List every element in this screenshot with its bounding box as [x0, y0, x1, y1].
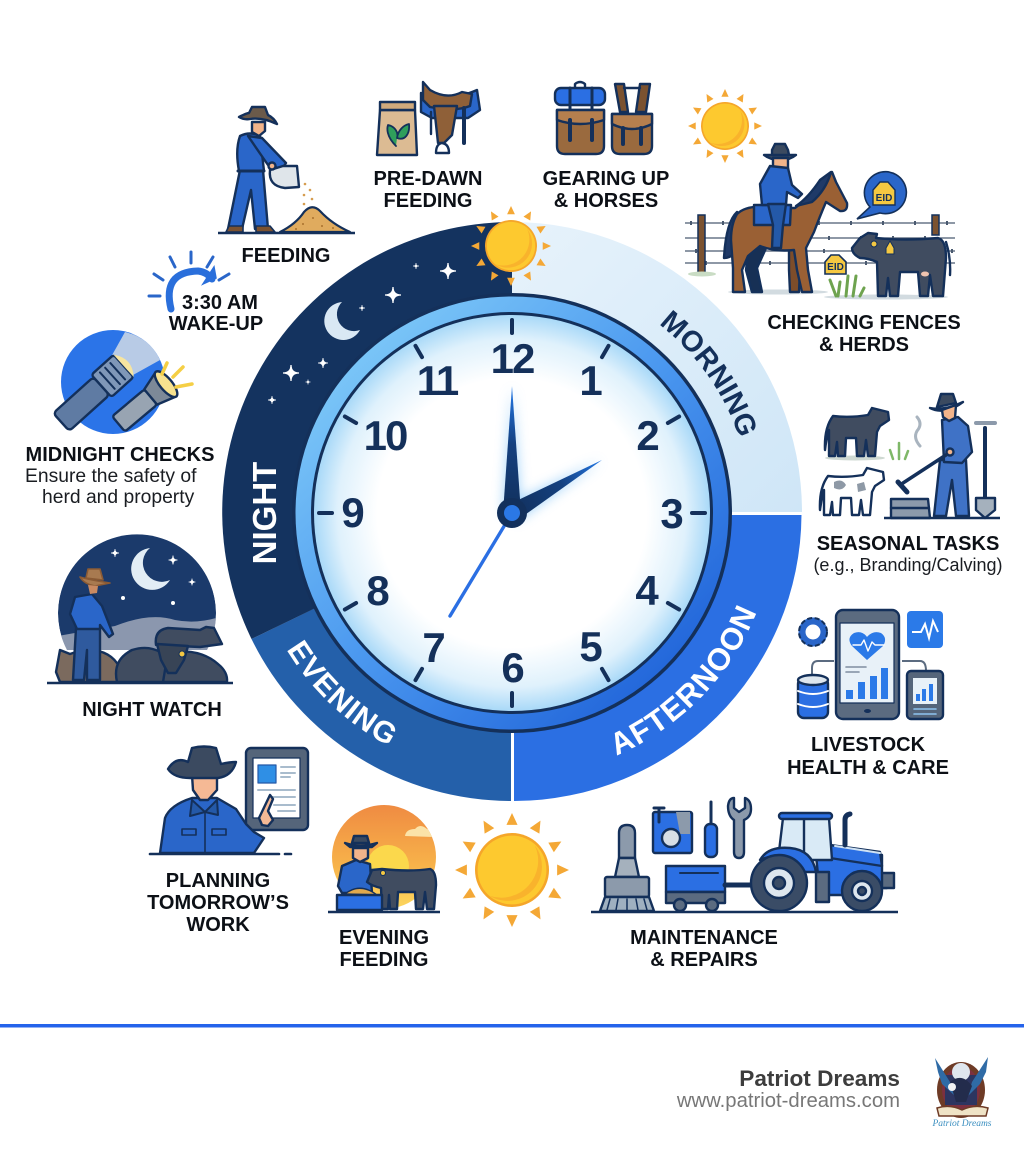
label: CHECKING FENCES — [767, 312, 961, 334]
label: morning: MORNING — [660, 310, 756, 436]
icon: morning sun — [688, 89, 762, 163]
icon: rancher with brand — [898, 394, 972, 516]
label: (e.g., Branding/Calving) — [813, 555, 1003, 575]
label: & REPAIRS — [650, 949, 758, 971]
icon: rancher — [338, 836, 377, 893]
ground line — [884, 517, 1000, 519]
icon: grass — [830, 276, 864, 296]
hand glow — [503, 386, 602, 521]
label: FEEDING — [340, 949, 428, 971]
clock numerals: 4 — [635, 567, 659, 614]
footer rule — [0, 1024, 1024, 1028]
night sky: moon and stars — [268, 263, 456, 404]
label: herd and property — [42, 487, 195, 508]
segment: morning — [512, 222, 802, 513]
icon: EID bubble — [857, 172, 906, 219]
icon: resting cattle — [56, 627, 227, 682]
icon: EID bubble: EID — [876, 193, 892, 204]
clock numerals: 8 — [366, 567, 389, 614]
ground line — [47, 682, 233, 684]
icon: smoke — [916, 417, 920, 446]
clock bezel — [292, 293, 732, 733]
logo: eagle and book: Patriot Dreams — [931, 1119, 992, 1129]
icon: light rays — [162, 363, 192, 387]
icon: phone — [836, 610, 899, 719]
clock face — [314, 315, 710, 711]
label: WORK — [186, 914, 250, 936]
time-of-day ring — [222, 222, 802, 801]
icon: air compressor cart — [666, 866, 752, 911]
label: night: NIGHT — [246, 462, 283, 564]
label — [813, 533, 1003, 575]
icon: rancher — [226, 107, 299, 232]
label: PRE-DAWN — [374, 168, 482, 190]
icon: grain pile — [280, 183, 350, 232]
ground line — [328, 911, 440, 913]
icon: blue disc — [61, 330, 165, 434]
label: 3:30 AM — [182, 292, 258, 314]
label: FEEDING — [384, 190, 472, 212]
icon: EID tag — [825, 255, 846, 274]
icon: saddle — [421, 82, 480, 153]
label: HEALTH & CARE — [787, 757, 949, 779]
clock numerals: 11 — [417, 357, 459, 404]
icon: anvil block — [891, 499, 930, 518]
label: SEASONAL TASKS — [817, 533, 999, 555]
icon: afternoon sun — [455, 813, 569, 927]
activity: feeding — [218, 107, 355, 267]
label: GEARING UP — [543, 168, 669, 190]
icon: screwdriver — [705, 802, 717, 857]
icon: moon and stars — [111, 548, 196, 605]
activity: evening feeding — [328, 805, 440, 971]
second hand — [450, 513, 512, 616]
clock numerals: 9 — [341, 489, 363, 536]
icon: grass tuft — [890, 443, 908, 459]
footer — [0, 1024, 1024, 1129]
label: & HORSES — [554, 190, 658, 212]
ground line — [150, 853, 291, 855]
icon: large flashlight — [51, 351, 138, 433]
label: PLANNING — [166, 870, 270, 892]
icon: tablet — [907, 671, 943, 719]
icon: sunrise on ring — [471, 206, 551, 286]
clock hub — [497, 498, 527, 528]
icon: pulse card — [907, 611, 943, 648]
clock — [292, 293, 732, 733]
icon: dark calf — [825, 408, 889, 460]
icon: barbed wire fence — [685, 215, 955, 300]
label: FEEDING — [242, 245, 330, 267]
icon: feed bag — [377, 102, 417, 155]
clock numerals — [341, 335, 682, 691]
icon: horse — [724, 172, 847, 292]
label: MIDNIGHT CHECKS — [26, 444, 214, 466]
icon: black cow — [852, 233, 950, 296]
segment: afternoon — [514, 515, 802, 801]
label: TOMORROW’S — [147, 892, 289, 914]
brand url: www.patriot-dreams.com — [676, 1090, 900, 1112]
activity: gearing up — [543, 82, 669, 212]
icon: motor — [653, 808, 692, 853]
clock numerals: 6 — [501, 644, 523, 691]
label: LIVESTOCK — [811, 734, 926, 756]
label: afternoon: AFTERNOON — [614, 605, 756, 756]
icon: tractor — [751, 813, 894, 911]
activity: night watch — [47, 534, 233, 721]
activity: midnight checks — [25, 330, 214, 508]
label: EVENING — [339, 927, 429, 949]
clock numerals: 3 — [660, 490, 682, 537]
clock numerals: 10 — [364, 412, 407, 459]
activity: pre-dawn feeding — [374, 82, 482, 212]
clock numerals: 7 — [422, 624, 444, 671]
label: Ensure the safety of — [25, 466, 197, 487]
icon: brush — [600, 825, 654, 911]
icon: wrench — [728, 798, 751, 858]
activity: maintenance — [591, 798, 898, 971]
icon: gear — [799, 618, 827, 646]
clock numerals: 5 — [579, 623, 602, 670]
activity: seasonal tasks — [813, 394, 1003, 575]
label: WAKE-UP — [169, 313, 263, 335]
activity: planning tomorrow's work — [147, 746, 308, 936]
icon: sunrise arrow — [149, 252, 229, 309]
activity: checking fences — [685, 144, 961, 356]
logo: eagle and book — [931, 1057, 992, 1129]
icon: shovel — [976, 423, 995, 518]
icon: database — [798, 675, 828, 718]
brand name: Patriot Dreams — [739, 1066, 900, 1091]
clock numerals: 12 — [491, 335, 534, 382]
icon: connectors — [812, 661, 926, 675]
clock numerals: 1 — [579, 357, 602, 404]
icon: tablet with document — [246, 748, 308, 830]
icon: flashlight beam — [106, 332, 160, 380]
segment: evening — [252, 513, 511, 801]
icon: EID tag: EID — [827, 262, 844, 273]
hour hand — [507, 460, 602, 521]
clock numerals: 2 — [636, 412, 658, 459]
icon: small flashlight — [108, 368, 181, 436]
icon: night sky disc — [58, 534, 216, 650]
segment: night — [222, 222, 512, 639]
activity: wake-up — [149, 252, 263, 335]
icon: rancher — [70, 569, 113, 680]
ground line — [218, 232, 355, 234]
icon: feed trough — [337, 888, 382, 910]
hour ticks — [319, 320, 705, 706]
icon: saddle bags — [555, 82, 652, 154]
icon: spotted calf — [820, 468, 884, 515]
label: & HERDS — [819, 334, 909, 356]
activity: livestock health — [787, 610, 949, 779]
minute hand — [503, 386, 521, 513]
ground line — [591, 911, 898, 913]
label — [25, 444, 214, 508]
label: evening: EVENING — [287, 640, 396, 743]
icon: sunset disc — [330, 805, 440, 912]
icon: black cow — [367, 869, 436, 909]
label: NIGHT WATCH — [82, 699, 222, 721]
icon: rancher — [160, 746, 273, 853]
icon: rider — [754, 144, 802, 248]
label: MAINTENANCE — [630, 927, 778, 949]
